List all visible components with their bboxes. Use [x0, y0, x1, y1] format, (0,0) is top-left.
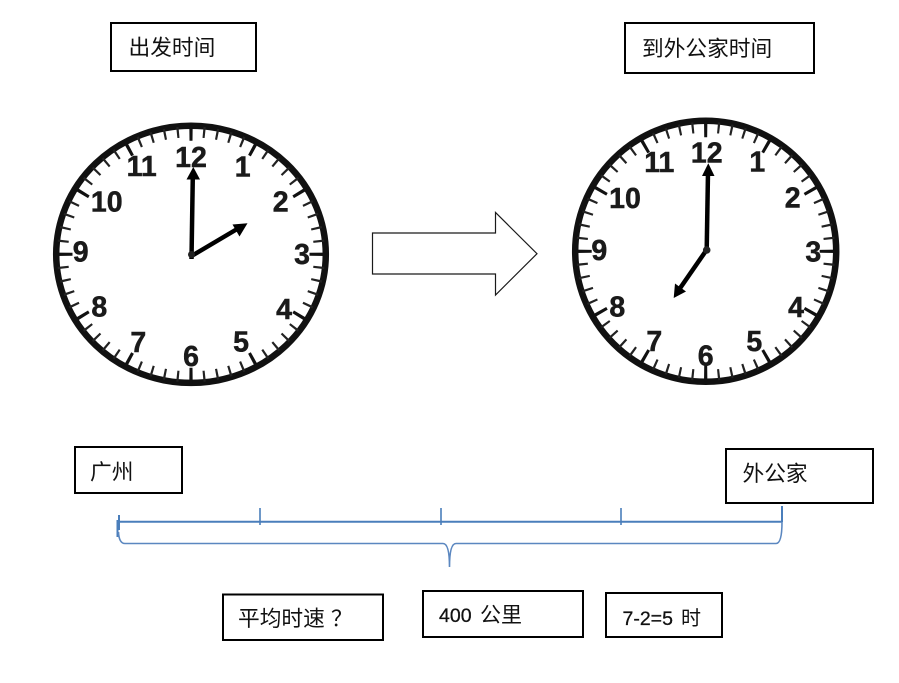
label: arrival time: 到外公家时间	[642, 36, 772, 61]
clock: arrival at 7 o'clock: 10	[609, 183, 641, 215]
clock: arrival at 7 o'clock: 3	[805, 236, 821, 268]
label: arrival time	[625, 23, 814, 73]
label: time 5 hours: 时	[681, 607, 701, 630]
label: average speed question: 平均时速	[238, 606, 325, 631]
label: time 5 hours	[606, 593, 722, 637]
minute hand	[702, 163, 714, 250]
label: grandfather's home: 外公家	[742, 461, 808, 486]
clock: arrival at 7 o'clock: 12	[691, 138, 723, 170]
clock: departure at 2 o'clock: 5	[233, 326, 249, 358]
clock: arrival at 7 o'clock: 6	[698, 340, 714, 372]
clock: arrival at 7 o'clock: 8	[609, 292, 625, 324]
label: departure time	[111, 23, 256, 71]
minute hand	[186, 167, 200, 259]
clock: arrival at 7 o'clock: 4	[788, 292, 804, 324]
clock: departure at 2 o'clock: 2	[273, 186, 289, 218]
hour hand	[192, 223, 248, 256]
brace: total distance	[118, 522, 782, 567]
clock: arrival at 7 o'clock: 1	[749, 146, 765, 178]
label: Guangzhou	[75, 447, 182, 493]
route line with ticks	[118, 506, 782, 537]
clock: arrival at 7 o'clock: 11	[644, 147, 675, 179]
label: Guangzhou: 广州	[90, 460, 133, 484]
clock: departure at 2 o'clock: 1	[235, 152, 251, 184]
clock: arrival at 7 o'clock: 9	[591, 235, 607, 267]
clock: departure at 2 o'clock	[56, 126, 326, 383]
label: distance 400 km: 公里	[480, 604, 522, 627]
label: time 5 hours: 7-2=5	[622, 608, 673, 630]
clock: departure at 2 o'clock: 12	[175, 142, 207, 174]
clock: arrival at 7 o'clock: 7	[646, 326, 662, 358]
label: departure time: 出发时间	[128, 35, 215, 60]
clock: departure at 2 o'clock: 7	[130, 327, 146, 359]
label: average speed question	[223, 594, 383, 640]
clock: departure at 2 o'clock: 6	[183, 341, 199, 373]
clock: departure at 2 o'clock: 4	[276, 294, 292, 326]
hour hand	[674, 250, 706, 298]
clock: departure at 2 o'clock: 3	[294, 239, 310, 271]
clock: departure at 2 o'clock: 11	[127, 151, 157, 183]
label: grandfather's home	[726, 449, 873, 503]
clock: departure at 2 o'clock: 9	[73, 236, 89, 268]
clock: departure at 2 o'clock: 10	[91, 186, 123, 218]
label: average speed question: ？	[331, 606, 353, 631]
clock: arrival at 7 o'clock: 5	[746, 326, 762, 358]
clock: arrival at 7 o'clock	[575, 121, 836, 382]
clock: departure at 2 o'clock: 8	[91, 292, 107, 324]
clock: arrival at 7 o'clock: 2	[785, 182, 801, 214]
label: distance 400 km	[423, 591, 583, 637]
label: distance 400 km: 400	[439, 605, 472, 627]
arrow: from departure to arrival	[372, 212, 537, 295]
